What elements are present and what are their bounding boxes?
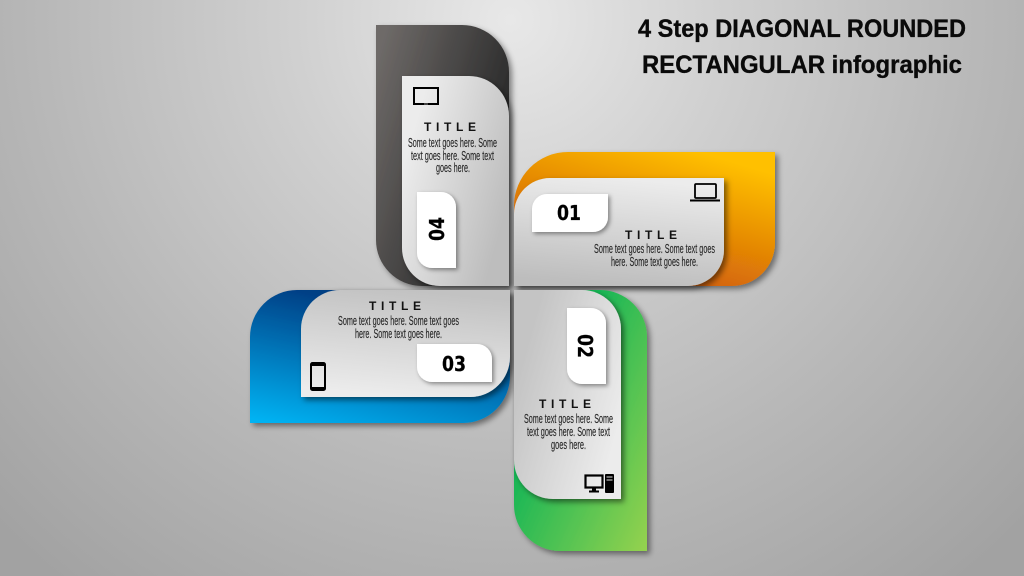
step 03 title: TITLE: [369, 299, 421, 313]
panel: step 02: [514, 290, 647, 551]
panel 03 inner card: [301, 290, 510, 397]
title: RECTANGULAR infographic: [642, 51, 962, 79]
panel: step 01: [514, 152, 775, 286]
step 02 title: TITLE: [539, 397, 591, 411]
icon: tablet: [414, 88, 438, 104]
step 02 body text: [524, 412, 613, 452]
number badge 04: 04: [425, 217, 449, 241]
title: 4 Step DIAGONAL ROUNDED: [638, 15, 966, 43]
panel 04 outer shape: [376, 25, 509, 286]
icon: desktop computer: [586, 474, 614, 493]
step 04 body text: text goes here. Some text: [411, 149, 494, 163]
panel 02 outer shape: [514, 290, 647, 551]
panel 02 inner card: [514, 290, 621, 499]
panel 03 outer shape: [250, 290, 510, 423]
title: [638, 15, 966, 79]
number badge 03: 03: [442, 352, 466, 376]
step 03 body text: [338, 314, 459, 341]
number badge 02: [567, 308, 606, 384]
panel 01 outer shape: [514, 152, 775, 286]
step 01 body text: [594, 242, 715, 269]
step 01 body text: Some text goes here. Some text goes: [594, 242, 715, 256]
number badge 02: 02: [573, 334, 597, 358]
step 01 title: TITLE: [625, 228, 677, 242]
step 02 body text: goes here.: [551, 438, 586, 452]
step 01 body text: here. Some text goes here.: [611, 255, 698, 269]
step 03 body text: here. Some text goes here.: [355, 327, 442, 341]
panel 01 inner card: [514, 178, 724, 286]
step 04 body text: goes here.: [436, 161, 470, 175]
step 04 title: TITLE: [424, 120, 476, 134]
panel: step 03: [250, 290, 510, 423]
step 02 body text: text goes here. Some text: [527, 425, 610, 439]
panel: step 04: [376, 25, 509, 286]
number badge 01: [532, 194, 608, 232]
step 02 body text: Some text goes here. Some: [524, 412, 613, 426]
number badge 01: 01: [557, 201, 581, 225]
step 03 body text: Some text goes here. Some text goes: [338, 314, 459, 328]
number badge 03: [417, 344, 492, 382]
panel 04 inner card: [402, 76, 509, 286]
step 04 body text: Some text goes here. Some: [408, 136, 497, 150]
icon: laptop: [690, 184, 720, 202]
step 04 body text: [408, 136, 497, 175]
number badge 04: [417, 192, 456, 268]
icon: phone: [311, 363, 325, 390]
